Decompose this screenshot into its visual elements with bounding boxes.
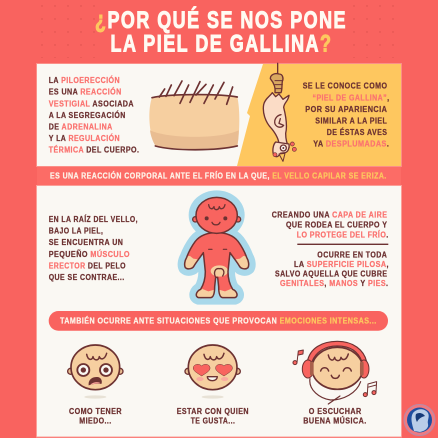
text: erector muscle: SE ENCUENTRA UN	[49, 238, 123, 247]
text: erector muscle: PEQUEÑO MÚSCULO	[49, 250, 130, 259]
icon: plucked chicken hanging	[263, 63, 296, 161]
icon: in-love face	[185, 345, 240, 399]
text: why it is called goosebumps: DE ÉSTAS AVES	[327, 128, 388, 137]
banner: reaction to cold: ES UNA REACCIÓN CORPORAL ANTE EL FRÍO EN LA QUE, EL VELLO CAPILAR SE ERIZA.	[50, 172, 387, 181]
text: why it is called goosebumps: “PIEL DE GALLINA”,	[312, 93, 390, 102]
text: where it occurs: GENITALES, MANOS Y PIES.	[280, 279, 388, 288]
text: why it is called goosebumps: POR SU APARIENCIA	[305, 105, 387, 114]
text: erector muscle: BAJO LA PIEL,	[49, 227, 103, 236]
icon: scared face	[68, 345, 123, 399]
text: why it is called goosebumps: SE LE CONOCE COMO	[303, 82, 387, 91]
text: erector muscle: ERECTOR DEL PELO	[49, 261, 126, 270]
panel: lower cream panel	[36, 186, 402, 437]
text: why it is called goosebumps: SIMILAR A LA PIEL	[315, 117, 387, 126]
text: piloerection definition: TÉRMICA DEL CUERPO.	[49, 146, 139, 155]
text: erector muscle	[49, 215, 138, 282]
text: piloerection definition: Y LA REGULACIÓN	[49, 134, 120, 143]
text: erector muscle: EN LA RAÍZ DEL VELLO,	[49, 215, 138, 224]
banner: intense emotions	[49, 311, 388, 331]
logo: university seal	[404, 404, 435, 436]
text: piloerection definition: LA PILOERECCIÓN	[49, 76, 120, 85]
label: o escuchar buena musica: BUENA MÚSICA.	[303, 416, 367, 425]
icon: face with headphones and music notes	[293, 341, 377, 404]
label: como tener miedo	[69, 407, 122, 425]
text: layer of air: LO PROTEGE DEL FRÍO.	[297, 230, 389, 239]
text: why it is called goosebumps: YA DESPLUMADAS.	[313, 139, 389, 148]
text: where it occurs	[275, 250, 389, 288]
text: layer of air	[272, 210, 389, 239]
label: estar con quien te gusta	[177, 407, 249, 425]
title: ¿POR QUÉ SE NOS PONE	[95, 6, 347, 34]
text: piloerection definition: ES UNA REACCIÓN	[49, 88, 122, 97]
text: where it occurs: LA SUPERFICIE PILOSA,	[294, 260, 389, 269]
text: piloerection definition	[49, 76, 139, 155]
label: o escuchar buena musica	[303, 407, 367, 425]
title	[95, 6, 347, 58]
banner: intense emotions: TAMBIÉN OCURRE ANTE SITUACIONES QUE PROVOCAN EMOCIONES INTENSAS...	[60, 317, 377, 326]
text: piloerection definition: A LA SEGREGACIÓN	[49, 111, 126, 120]
text: piloerection definition: DE ADRENALINA	[49, 123, 113, 132]
label: como tener miedo: COMO TENER	[69, 407, 122, 416]
banner: reaction to cold	[37, 167, 401, 185]
text: layer of air: QUE RODEA EL CUERPO Y	[286, 220, 388, 229]
icon: skin with raised hairs	[149, 81, 239, 150]
label: estar con quien te gusta: TE GUSTA...	[191, 416, 235, 425]
text: erector muscle: QUE SE CONTRAE...	[49, 273, 125, 282]
text: where it occurs: SALVO AQUELLA QUE CUBRE	[275, 270, 388, 279]
text: why it is called goosebumps	[303, 82, 390, 148]
label: estar con quien te gusta: ESTAR CON QUIEN	[177, 407, 249, 416]
header dot pattern	[38, 2, 400, 58]
panel: yellow chicken background	[237, 64, 401, 166]
text: layer of air: CREANDO UNA CAPA DE AIRE	[272, 210, 388, 219]
label: o escuchar buena musica: O ESCUCHAR	[309, 407, 362, 416]
label: como tener miedo: MIEDO...	[79, 416, 112, 425]
title: LA PIEL DE GALLINA?	[110, 30, 333, 58]
icon: baby body with blue halo	[182, 190, 252, 300]
panel: piloerection	[36, 63, 402, 166]
text: where it occurs: OCURRE EN TODA	[317, 250, 387, 259]
text: piloerection definition: VESTIGIAL ASOCIADA	[49, 99, 134, 108]
